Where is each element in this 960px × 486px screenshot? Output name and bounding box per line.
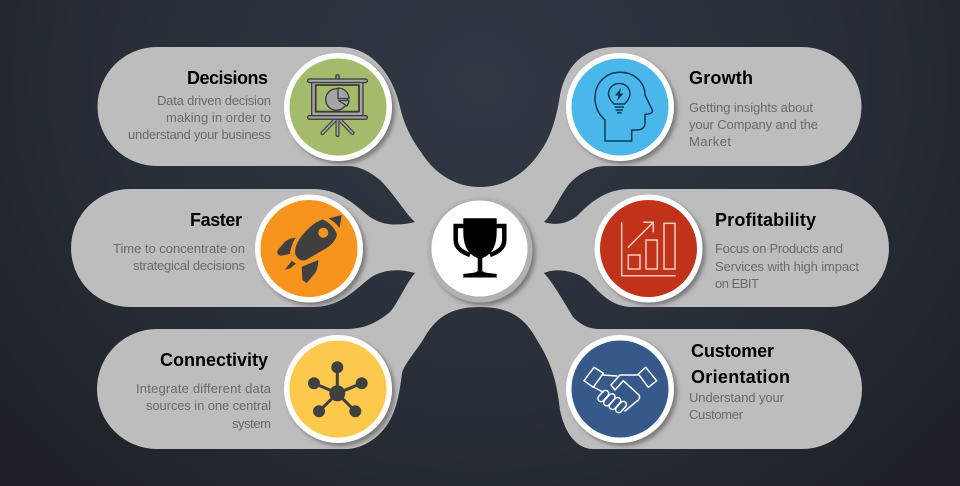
text: Decisions description: making in order to	[166, 110, 271, 125]
text: Growth description: Market	[689, 134, 731, 149]
connected grey pills network	[71, 47, 889, 449]
panel: Faster	[113, 194, 363, 302]
badge: Connectivity	[284, 335, 392, 443]
text: Connectivity description	[136, 381, 272, 431]
icon: presentation board	[308, 75, 367, 135]
panel: Decisions	[128, 53, 392, 161]
text: Growth description: Getting insights about	[689, 100, 813, 115]
heading: Faster: Faster	[190, 210, 242, 230]
text: Profitability description: on EBIT	[715, 276, 759, 291]
icon: head with light bulb	[595, 72, 653, 141]
icon: rocket	[277, 215, 342, 283]
heading: Connectivity: Connectivity	[160, 350, 268, 370]
icon: network hub	[308, 361, 368, 417]
text: Decisions description: Data driven decision	[157, 93, 271, 108]
heading: Customer Orientation: Customer	[691, 341, 774, 361]
text: Profitability description: Focus on Products and	[715, 241, 843, 256]
text: Faster description	[113, 241, 246, 273]
text: Customer Orientation description	[689, 390, 785, 422]
text: Growth description: your Company and the	[689, 117, 818, 132]
panel: Connectivity	[136, 335, 392, 443]
panel: Customer Orientation	[566, 335, 790, 443]
text: Connectivity description: sources in one central	[146, 398, 271, 413]
text: Connectivity description: system	[232, 416, 271, 431]
heading: Decisions: Decisions	[187, 68, 268, 88]
badge: Profitability	[594, 194, 702, 302]
heading: Growth: Growth	[689, 68, 753, 88]
text: Customer Orientation description: Understand your	[689, 390, 785, 405]
text: Faster description: strategical decisions	[133, 258, 246, 273]
text: Decisions description	[128, 93, 272, 142]
badge: Growth	[566, 53, 674, 161]
text: Profitability description: Services with high impact	[715, 259, 859, 274]
icon: rising bar chart	[622, 222, 676, 276]
text: Decisions description: understand your business	[128, 127, 272, 142]
text: Connectivity description: Integrate different data	[136, 381, 272, 396]
icon: handshake	[584, 367, 657, 414]
text: Profitability description	[715, 241, 859, 291]
text: Faster description: Time to concentrate on	[113, 241, 245, 256]
text: Customer Orientation description: Customer	[689, 407, 744, 422]
icon: trophy	[456, 218, 504, 278]
badge: Customer Orientation	[566, 335, 674, 443]
panel: Profitability	[594, 194, 859, 302]
badge: Faster	[255, 194, 363, 302]
heading: Customer Orientation: Orientation	[691, 367, 790, 387]
heading: Customer Orientation	[691, 341, 790, 387]
central trophy badge	[428, 198, 532, 302]
badge: Decisions	[284, 53, 392, 161]
text: Growth description	[689, 100, 818, 149]
panel: Growth	[566, 53, 818, 161]
heading: Profitability: Profitability	[715, 210, 816, 230]
